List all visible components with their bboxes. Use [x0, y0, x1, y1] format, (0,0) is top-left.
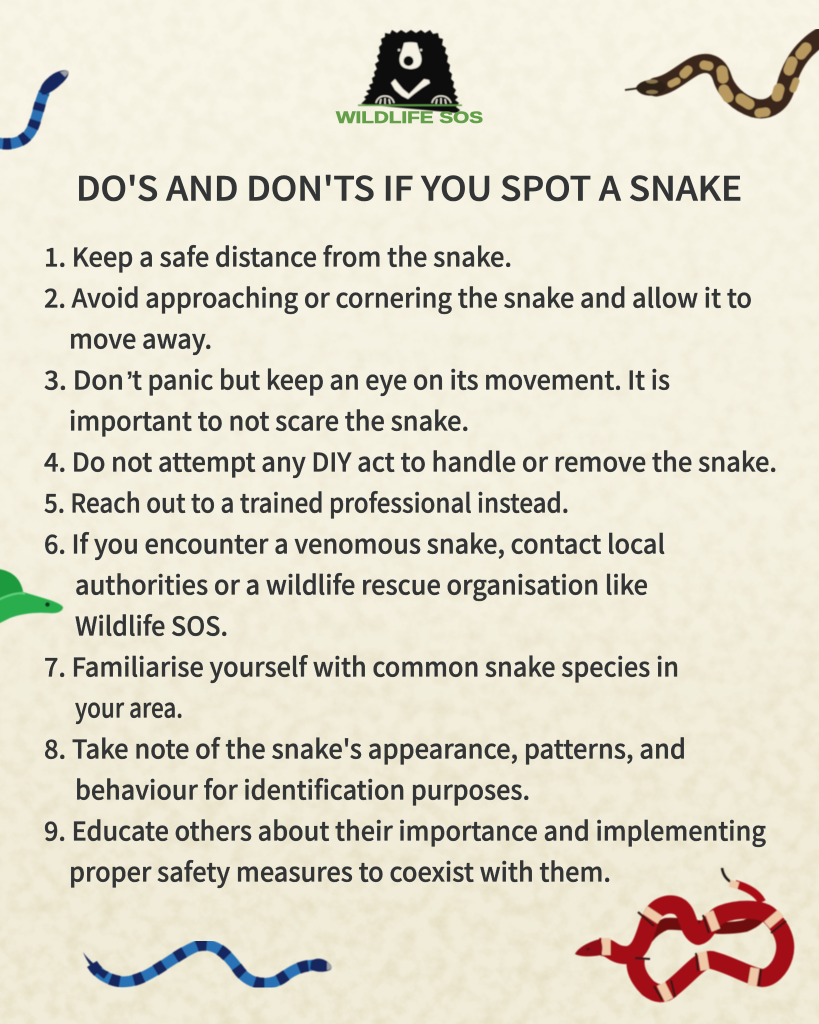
tip 3: 3. Don [44, 360, 124, 398]
tip 2: move away. [69, 320, 212, 356]
tip 4: 4. Do not attempt any DIY act to handle or remove the snake. [44, 442, 777, 480]
tip 3: ’ [126, 366, 133, 396]
paws [376, 96, 451, 104]
title: DO'S AND DON'TS IF YOU SPOT A SNAKE [76, 162, 742, 210]
muzzle [400, 42, 422, 69]
tip 7: 7. Familiarise yourself with common snake species in [44, 648, 679, 684]
tip 3 [44, 360, 670, 438]
icon: coral snake bottom right [575, 868, 786, 1000]
tip 7 [44, 648, 679, 726]
tip 9: proper safety measures to coexist with them. [69, 852, 611, 890]
tip 3: t panic but keep an eye on its movement. It is [132, 360, 670, 398]
chest mark [391, 79, 430, 99]
tip 8 [44, 730, 686, 808]
tip 2 [44, 278, 752, 356]
logo: Wildlife SOS [336, 30, 483, 127]
icon: blue snake top left [0, 70, 68, 144]
tip 9: 9. Educate others about their importance and implementing [44, 812, 766, 848]
icon: sloth bear [358, 30, 462, 113]
tip 6: 6. If you encounter a venomous snake, contact local [44, 524, 665, 562]
tip 6: Wildlife SOS. [75, 606, 228, 644]
tip 2: 2. Avoid approaching or cornering the snake and allow it to [44, 278, 752, 316]
tip 5: 5. Reach out to a trained professional instead. [44, 484, 569, 520]
tip 3: important to not scare the snake. [69, 402, 469, 438]
icon: blue snake bottom left [83, 945, 332, 983]
tip 1: 1. Keep a safe distance from the snake. [44, 238, 512, 274]
tip 6: authorities or a wildlife rescue organisation like [75, 566, 648, 602]
icon: brown patterned snake top right [625, 37, 819, 113]
icon: green snake left [0, 569, 63, 624]
tip 8: behaviour for identification purposes. [75, 770, 530, 808]
tip 7: your area. [75, 688, 183, 726]
tip 6 [44, 524, 665, 644]
list: safety tips [44, 238, 777, 890]
tip 8: 8. Take note of the snake's appearance, patterns, and [44, 730, 686, 766]
tip 9 [44, 812, 766, 890]
logo wordmark: WILDLIFE SOS [336, 108, 483, 127]
